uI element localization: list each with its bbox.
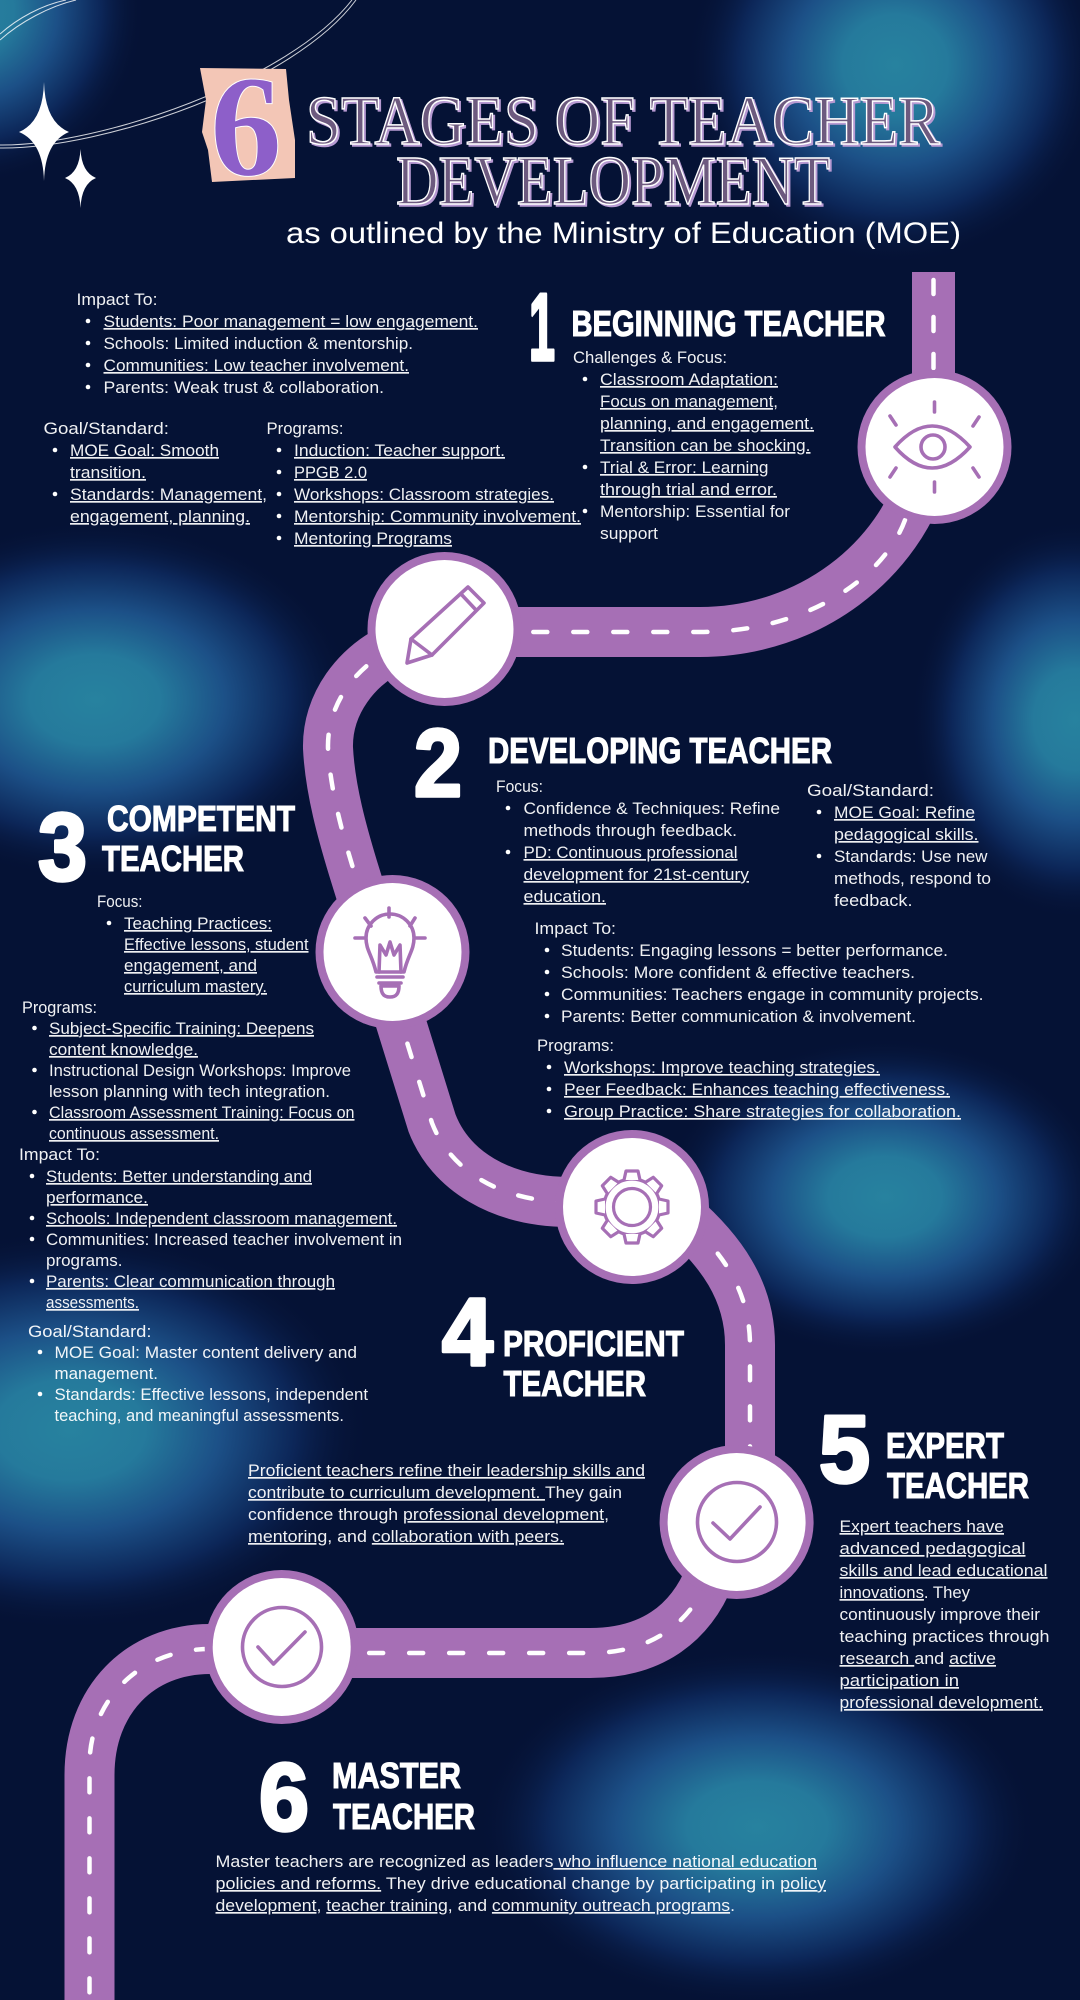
text block: programs: PPGB 2.0 (294, 463, 367, 482)
milestone 4: gear icon (555, 1130, 709, 1284)
text block: description: innovations. They (840, 1583, 970, 1602)
text block: impact: Communities: Teachers engage in community projects. (561, 985, 984, 1004)
text block: goal and standard: MOE Goal: Refine (834, 803, 975, 822)
text block: programs: Mentorship: Community involvement. (294, 507, 581, 526)
text block: goal and standard: engagement, planning. (70, 507, 250, 526)
text block: programs: Classroom Assessment Training: Focus on (49, 1103, 354, 1122)
text block: description (840, 1517, 1050, 1712)
text block: programs: lesson planning with tech integration. (49, 1082, 330, 1101)
text block: challenges and focus: Mentorship: Essential for (600, 502, 790, 521)
text block: goal and standard: Goal/Standard: (44, 419, 169, 438)
heading: PROFICIENT (503, 1323, 684, 1364)
text block: focus: Focus: (97, 892, 142, 911)
text block: description: advanced pedagogical (840, 1539, 1026, 1558)
text block: goal and standard: management. (54, 1364, 158, 1383)
text block: programs: Workshops: Classroom strategies. (294, 485, 554, 504)
text block: description: professional development. (840, 1693, 1043, 1712)
text block: programs (266, 419, 581, 548)
text block: goal and standard: Standards: Management, (70, 485, 267, 504)
text block: focus: development for 21st-century (524, 865, 750, 884)
text block: impact: Impact To: (19, 1145, 100, 1164)
text block: description: Proficient teachers refine their leadership skills and (248, 1461, 645, 1480)
text block: impact: Communities: Increased teacher involvement in (46, 1230, 402, 1249)
milestone 3: light bulb icon (316, 875, 470, 1029)
text block: impact: Schools: Limited induction & mentorship. (104, 334, 413, 353)
title line 1: STAGES OF TEACHER (306, 83, 940, 160)
text block: goal and standard: transition. (70, 463, 146, 482)
title line 1: STAGES OF TEACHER (308, 85, 942, 162)
road centre dashes (90, 280, 934, 2000)
text block: impact: programs. (46, 1251, 122, 1270)
text block: goal and standard: Standards: Use new (834, 847, 988, 866)
text block: programs: Workshops: Improve teaching strategies. (564, 1058, 880, 1077)
title line 2: DEVELOPMENT (398, 145, 832, 222)
text block: description: Master teachers are recognized as leaders who influence national education (216, 1852, 817, 1871)
text block: programs (22, 998, 354, 1143)
text block: focus: Teaching Practices: (124, 914, 272, 933)
text block: goal and standard: Standards: Effective lessons, independent (54, 1385, 368, 1404)
text block: challenges and focus: through trial and error. (600, 480, 777, 499)
text block: description: Expert teachers have (840, 1517, 1004, 1536)
text block: goal and standard: pedagogical skills. (834, 825, 978, 844)
heading: COMPETENT (107, 798, 295, 839)
heading (886, 1425, 1029, 1506)
number 5: 5 (819, 1396, 870, 1503)
milestone 5: check icon (660, 1445, 814, 1599)
text block: impact: performance. (46, 1188, 148, 1207)
number 4: 4 (442, 1279, 493, 1386)
text block: focus: PD: Continuous professional (524, 843, 738, 862)
text block: impact: Parents: Weak trust & collaboration. (104, 378, 384, 397)
text block: description: research and active (840, 1649, 996, 1668)
milestone 1: eye icon (858, 370, 1012, 524)
text block: description: continuously improve their (840, 1605, 1040, 1624)
heading: TEACHER (102, 838, 244, 879)
text block: programs: Subject-Specific Training: Deepens (49, 1019, 314, 1038)
heading: MASTER (332, 1755, 461, 1796)
heading: TEACHER (504, 1363, 646, 1404)
heading: DEVELOPING TEACHER (488, 730, 832, 771)
text block: goal and standard: teaching, and meaningful assessments. (54, 1406, 344, 1425)
text block: impact: Schools: More confident & effective teachers. (561, 963, 915, 982)
decorative orbit lines (0, 0, 356, 148)
subtitle: as outlined by the Ministry of Education (MOE) (286, 217, 961, 250)
text block: challenges and focus: Challenges & Focus: (573, 348, 727, 367)
panel: stage 5 expert teacher (819, 1396, 1050, 1712)
text block: impact (19, 1145, 402, 1312)
heading: EXPERT (886, 1425, 1004, 1466)
text block: goal and standard: methods, respond to (834, 869, 991, 888)
text block: goal and standard (28, 1322, 368, 1425)
text block: goal and standard: feedback. (834, 891, 912, 910)
text block: impact: Communities: Low teacher involvement. (104, 356, 409, 375)
text block: description: skills and lead educational (840, 1561, 1048, 1580)
text block: description: mentoring, and collaboration with peers. (248, 1527, 564, 1546)
text block: impact: Schools: Independent classroom management. (46, 1209, 397, 1228)
text block: description: policies and reforms. They drive educational change by participating in policy (216, 1874, 827, 1893)
milestone 2: pencil icon (368, 552, 522, 706)
number 6: 6 (259, 1744, 309, 1851)
text block: focus: engagement, and (124, 956, 257, 975)
number 2: 2 (414, 710, 462, 817)
text block: description: teaching practices through (840, 1627, 1050, 1646)
text block: description: development, teacher training , and community outreach programs . (216, 1896, 735, 1915)
text block: description: contribute to curriculum development. They gain (248, 1483, 622, 1502)
panel: stage 1 beginning teacher: 1 (529, 274, 555, 381)
text block: challenges and focus: Classroom Adaptation: (600, 370, 778, 389)
text block: impact (534, 919, 984, 1026)
text block: programs: Mentoring Programs (294, 529, 452, 548)
text block: challenges and focus: support (600, 524, 658, 543)
heading: TEACHER (887, 1465, 1029, 1506)
text block: challenges and focus: Focus on management, (600, 392, 778, 411)
text block: impact: Students: Engaging lessons = better performance. (561, 941, 948, 960)
panel: stage 2 developing teacher (414, 710, 991, 1121)
text block: programs: Instructional Design Workshops: Improve (49, 1061, 351, 1080)
panel: stage 3 competent teacher (19, 794, 402, 1425)
panel: stage 4 proficient teacher (248, 1279, 684, 1546)
text block: goal and standard: Goal/Standard: (28, 1322, 152, 1341)
text block: impact: assessments. (46, 1293, 139, 1312)
torn paper numeral 6: 6 (210, 47, 282, 207)
text block: description (216, 1852, 827, 1915)
text block: goal and standard: MOE Goal: Master content delivery and (54, 1343, 357, 1362)
text block: impact: Parents: Better communication & involvement. (561, 1007, 916, 1026)
text block: description: confidence through professional development , (248, 1505, 609, 1524)
text block: impact: Impact To: (76, 290, 158, 309)
text block: focus: Effective lessons, student (124, 935, 309, 954)
panel: stage 6 master teacher (216, 1744, 827, 1915)
text block: impact: Impact To: (534, 919, 616, 938)
text block: focus (97, 892, 309, 996)
text block: goal and standard: MOE Goal: Smooth (70, 441, 219, 460)
heading: BEGINNING TEACHER (572, 303, 886, 344)
text block: programs: Programs: (22, 998, 97, 1017)
text block: programs: Peer Feedback: Enhances teaching effectiveness. (564, 1080, 950, 1099)
text block: impact: Students: Better understanding and (46, 1167, 312, 1186)
text block: programs: content knowledge. (49, 1040, 198, 1059)
text block: challenges and focus: Transition can be shocking. (600, 436, 810, 455)
icon: small sparkle (65, 149, 96, 208)
text block: focus: education. (524, 887, 606, 906)
text block: goal and standard (44, 419, 267, 526)
text block: description (248, 1461, 645, 1546)
text block: programs: Group Practice: Share strategies for collaboration. (564, 1102, 961, 1121)
milestone 6: check icon (205, 1570, 359, 1724)
heading: TEACHER (333, 1796, 475, 1837)
text block: focus (496, 777, 780, 906)
heading (332, 1755, 475, 1837)
text block: challenges and focus: planning, and engagement. (600, 414, 814, 433)
text block: focus: curriculum mastery. (124, 977, 267, 996)
title (200, 47, 961, 250)
text block: programs: continuous assessment. (49, 1124, 219, 1143)
text block: focus: methods through feedback. (524, 821, 737, 840)
text block: programs (537, 1036, 961, 1121)
text block: goal and standard: Goal/Standard: (807, 781, 934, 800)
text block: challenges and focus: Trial & Error: Learning (600, 458, 768, 477)
text block: impact (76, 290, 478, 397)
text block: impact: Parents: Clear communication through (46, 1272, 335, 1291)
title line 2: DEVELOPMENT (396, 143, 830, 220)
winding road (90, 272, 934, 2000)
text block: focus: Focus: (496, 777, 543, 796)
heading (102, 798, 295, 879)
text block: challenges and focus (573, 348, 814, 543)
text block: description: participation in (840, 1671, 959, 1690)
text block: programs: Programs: (537, 1036, 614, 1055)
text block: focus: Confidence & Techniques: Refine (524, 799, 780, 818)
number 3: 3 (38, 794, 87, 901)
text block: impact: Students: Poor management = low engagement. (104, 312, 478, 331)
text block: programs: Programs: (266, 419, 344, 438)
panel: stage 1 beginning teacher (44, 274, 886, 548)
text block: programs: Induction: Teacher support. (294, 441, 505, 460)
icon: large sparkle (19, 82, 69, 181)
heading (503, 1323, 684, 1404)
text block: goal and standard (807, 781, 991, 910)
